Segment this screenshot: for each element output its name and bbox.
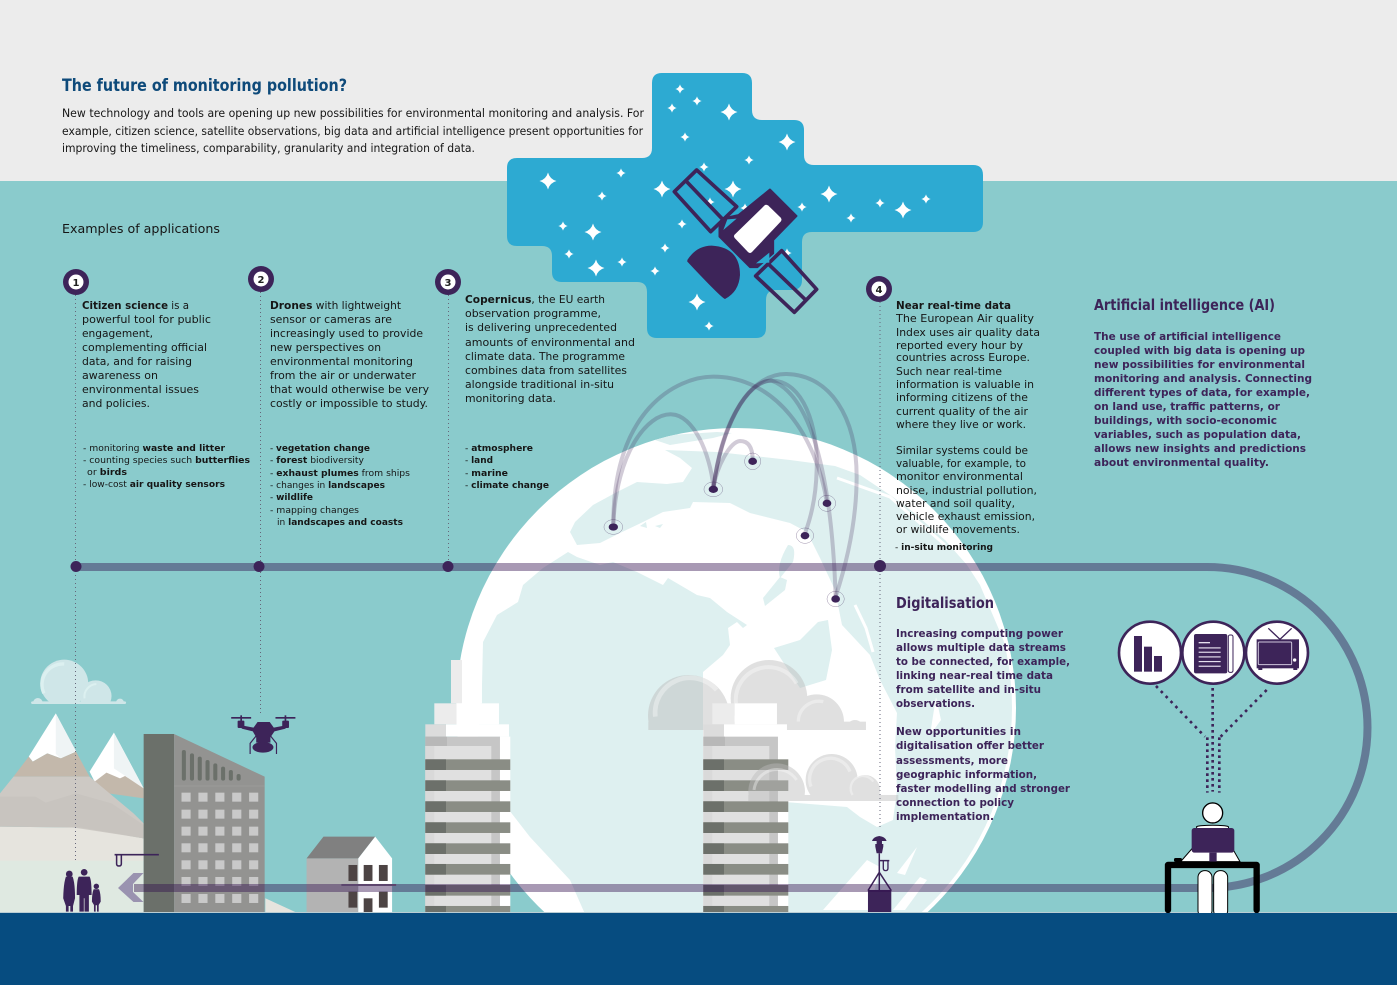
text: copernicus: combines data from satellites — [465, 364, 627, 377]
icon: bubble with document — [1182, 622, 1244, 684]
text: digitalisation: to be connected, for example, — [896, 655, 1070, 668]
text: digitalisation: assessments, more — [896, 754, 1008, 767]
timeline with return arc and arrow — [76, 567, 1367, 888]
text: drones: that would otherwise be very — [270, 383, 429, 396]
text: copernicus: Copernicus, the EU earth — [465, 293, 605, 306]
text: copernicus: monitoring data. — [465, 392, 556, 405]
text: citizen science: environmental issues — [82, 383, 199, 396]
list: copernicus applications: - climate change — [465, 481, 549, 491]
text: citizen science: data, and for raising — [82, 355, 192, 368]
text: near real-time data — [895, 299, 1040, 536]
list: drone applications: - mapping changes — [270, 506, 359, 516]
icon: air sensor on building — [115, 855, 159, 866]
text: near real-time data: countries across Europe. — [896, 351, 1030, 364]
data arcs on globe — [604, 374, 857, 607]
house — [307, 837, 396, 912]
badge 2 — [248, 266, 274, 292]
text: near real-time data: vehicle exhaust emission, — [896, 510, 1035, 523]
lower cloud highlights — [754, 758, 873, 795]
badge 4 — [866, 276, 892, 302]
icon: drone — [231, 715, 295, 754]
globe — [456, 428, 1016, 912]
list: drone applications — [270, 444, 410, 528]
text: copernicus: amounts of environmental and — [465, 336, 635, 349]
text: digitalisation: connection to policy — [896, 796, 1014, 809]
list: copernicus applications: - atmosphere — [465, 444, 533, 454]
return arrow head — [118, 873, 144, 902]
text: citizen science — [82, 299, 211, 410]
list: drone applications: - exhaust plumes from ships — [270, 469, 410, 479]
timeline nodes — [70, 560, 886, 572]
cloud: upper left — [31, 660, 126, 704]
text: digitalisation: geographic information, — [896, 768, 1037, 781]
text: digitalisation: from satellite and in-situ — [896, 683, 1041, 696]
badge 3 — [435, 269, 461, 295]
text: artificial intelligence: coupled with big data is opening up — [1094, 344, 1305, 357]
text: near real-time data: Such near real-time — [896, 365, 1002, 378]
heading: digitalisation: Digitalisation — [896, 594, 994, 612]
text: digitalisation: Increasing computing power — [896, 627, 1064, 640]
text: digitalisation: linking near-real time data — [896, 669, 1053, 682]
text: digitalisation: observations. — [896, 697, 975, 710]
text: copernicus: is delivering unprecedented — [465, 321, 617, 334]
text: artificial intelligence — [1094, 330, 1312, 469]
text: drones: increasingly used to provide — [270, 327, 423, 340]
text: citizen science: powerful tool for public — [82, 313, 211, 326]
intro text: improving the timeliness, comparability, granularity and integration of data. — [62, 141, 475, 155]
office building — [144, 734, 265, 912]
icon: satellite — [674, 170, 817, 312]
text: copernicus — [465, 293, 635, 405]
text: artificial intelligence: allows new insights and predictions — [1094, 442, 1306, 455]
text: digitalisation: New opportunities in — [896, 725, 1021, 738]
tower right — [703, 703, 788, 913]
text: citizen science: and policies. — [82, 397, 150, 410]
tower left with spire — [425, 660, 510, 913]
list: citizen science applications: or birds — [87, 468, 127, 478]
list: drone applications: - forest biodiversity — [270, 456, 365, 466]
text: digitalisation: allows multiple data streams — [896, 641, 1066, 654]
text: digitalisation: faster modelling and stronger — [896, 782, 1071, 795]
clouds in front of tower — [748, 754, 898, 801]
cloud highlights — [655, 667, 823, 722]
dotted data streams — [1156, 686, 1267, 793]
text: near real-time data: Near real-time data — [896, 299, 1011, 312]
text: near real-time data: where they live or work. — [896, 418, 1026, 431]
dotted connector lines — [76, 292, 880, 862]
teal background — [0, 181, 1397, 913]
text: drones: sensor or cameras are — [270, 313, 392, 326]
list: drone applications: - wildlife — [270, 493, 313, 503]
list: drone applications: in landscapes and coasts — [277, 518, 403, 528]
text: artificial intelligence: different types of data, for example, — [1094, 386, 1310, 399]
icon: bubble with television — [1246, 622, 1308, 684]
list: copernicus applications — [465, 444, 549, 491]
heading: artificial intelligence: Artificial intelligence (AI) — [1094, 296, 1275, 314]
badge 1: 1 — [73, 278, 80, 289]
text: near real-time data: information is valuable in — [896, 378, 1034, 391]
badge 2: 2 — [258, 275, 265, 286]
ground band — [0, 913, 1397, 985]
list: citizen science applications: - counting species such butterflies — [83, 456, 250, 466]
bottom band cover — [1150, 913, 1280, 923]
icon: in-situ monitoring station — [868, 836, 891, 912]
text: near real-time data: noise, industrial pollution, — [896, 484, 1037, 497]
text: near real-time data: Similar systems could be — [896, 444, 1028, 457]
text: citizen science: engagement, — [82, 327, 153, 340]
text: artificial intelligence: The use of artificial intelligence — [1094, 330, 1281, 343]
intro text: example, citizen science, satellite observations, big data and artificial intelligence present opportunities for — [62, 124, 643, 138]
sky background — [0, 0, 1397, 181]
icon: person at desk — [1168, 803, 1257, 917]
panel: starry space cross — [507, 73, 983, 338]
text: near real-time data: informing citizens of the — [896, 391, 1028, 404]
list: drone applications: - changes in landscapes — [270, 481, 385, 491]
text: artificial intelligence: about environmental quality. — [1094, 456, 1269, 469]
text: near real-time data: or wildlife movements. — [896, 523, 1020, 536]
badge 3: 3 — [445, 278, 452, 289]
text: near real-time data: Index uses air quality data — [896, 326, 1040, 339]
text: digitalisation: digitalisation offer better — [896, 739, 1045, 752]
text: near real-time data: reported every hour by — [896, 339, 1023, 352]
text: artificial intelligence: new possibilities for environmental — [1094, 358, 1305, 371]
text: drones: new perspectives on — [270, 341, 381, 354]
list: near real-time applications: - in-situ monitoring — [895, 543, 993, 553]
intro text — [62, 106, 644, 155]
icon: bubble with bar chart — [1119, 622, 1181, 684]
text: artificial intelligence: monitoring and analysis. Connecting — [1094, 372, 1312, 385]
text: near real-time data: The European Air quality — [895, 312, 1034, 325]
badge 4: 4 — [876, 285, 883, 296]
text: near real-time data: monitor environmental — [896, 470, 1023, 483]
text: copernicus: climate data. The programme — [465, 350, 625, 363]
list: drone applications: - vegetation change — [270, 444, 370, 454]
text: artificial intelligence: buildings, with socio-economic — [1094, 414, 1277, 427]
text: copernicus: alongside traditional in-situ — [465, 378, 614, 391]
text: citizen science: complementing official — [82, 341, 207, 354]
intro text: New technology and tools are opening up new possibilities for environmental monitoring and analysis. For — [62, 106, 644, 120]
icon: family of citizens — [63, 869, 101, 912]
text: drones: Drones with lightweight — [270, 299, 402, 312]
list: citizen science applications: - monitoring waste and litter — [83, 444, 226, 454]
text: drones — [270, 299, 429, 410]
text: drones: environmental monitoring — [270, 355, 413, 368]
list: copernicus applications: - marine — [465, 469, 508, 479]
text: digitalisation: implementation. — [896, 810, 994, 823]
text: artificial intelligence: on land use, traffic patterns, or — [1094, 400, 1281, 413]
text: copernicus: observation programme, — [465, 307, 601, 320]
text: artificial intelligence: variables, such as population data, — [1094, 428, 1301, 441]
text: near real-time data: water and soil quality, — [896, 497, 1015, 510]
badge 1 — [63, 269, 89, 295]
text: drones: costly or impossible to study. — [270, 397, 428, 410]
mountains — [0, 713, 296, 912]
list: citizen science applications: - low-cost air quality sensors — [83, 480, 225, 490]
text: near real-time data: current quality of the air — [896, 405, 1028, 418]
clouds behind tower — [648, 660, 866, 730]
text: near real-time data: valuable, for example, to — [896, 457, 1026, 470]
text: citizen science: Citizen science is a — [82, 299, 189, 312]
text: citizen science: awareness on — [82, 369, 158, 382]
text: digitalisation — [896, 627, 1071, 823]
text: drones: from the air or underwater — [270, 369, 416, 382]
title: The future of monitoring pollution? — [62, 76, 347, 95]
list: citizen science applications — [83, 444, 250, 490]
list: copernicus applications: - land — [465, 456, 493, 466]
subheading: examples of applications: Examples of applications — [62, 221, 220, 236]
